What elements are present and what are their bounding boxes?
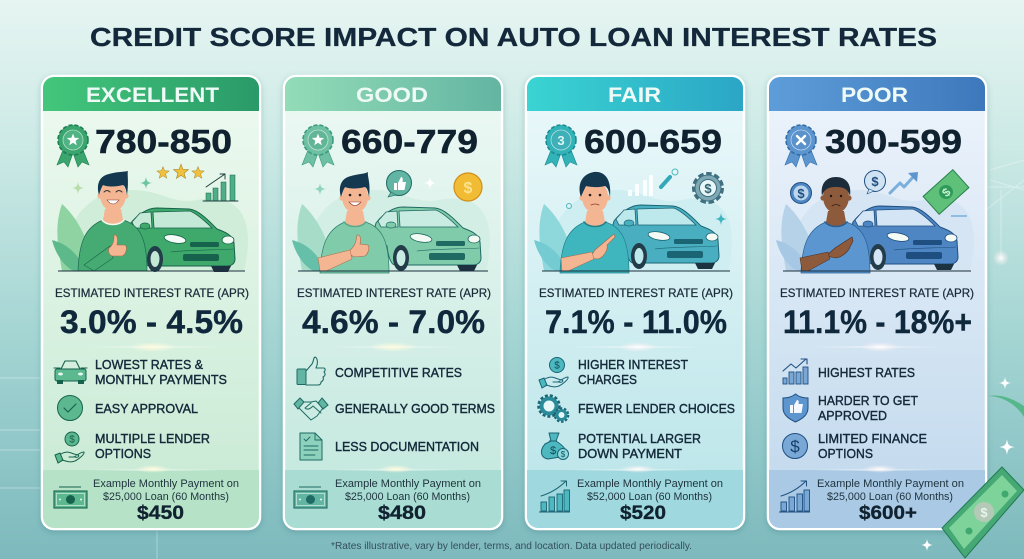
score range: 600-659 bbox=[584, 123, 722, 160]
bullet: lowest rates: LOWEST RATES & bbox=[95, 357, 203, 372]
header: poor: POOR bbox=[841, 84, 908, 107]
rate: 7.1 to 11.0: 7.1% - 11.0% bbox=[545, 304, 727, 340]
bullet: fewer lender choices: FEWER LENDER CHOICES bbox=[578, 401, 735, 416]
panel: excellent bbox=[42, 76, 260, 529]
bullet: higher interest bbox=[578, 357, 688, 387]
icon: floating dollar bill bbox=[942, 467, 1024, 558]
bullet: harder to get: APPROVED bbox=[818, 408, 887, 423]
bullet: potential larger: DOWN PAYMENT bbox=[578, 446, 682, 461]
icon: shield thumb bbox=[783, 394, 808, 422]
illustration: worried man and blue car: $ bbox=[939, 185, 954, 200]
icon: handshake bbox=[294, 398, 328, 420]
bullet: potential larger: POTENTIAL LARGER bbox=[578, 431, 701, 446]
icon: check circle bbox=[58, 396, 82, 420]
title: CREDIT SCORE IMPACT ON AUTO LOAN INTEREST RATES bbox=[90, 22, 937, 52]
bullet: generally good terms: GENERALLY GOOD TERMS bbox=[335, 401, 495, 416]
label: estimated rate: ESTIMATED INTEREST RATE (APR) bbox=[297, 286, 491, 300]
icon: rosette cross bbox=[785, 125, 817, 167]
bullet: harder to get: HARDER TO GET bbox=[818, 393, 918, 408]
band: monthly payment: Example Monthly Payment on bbox=[93, 478, 239, 490]
band: monthly payment: $520 bbox=[620, 503, 666, 524]
panel: poor bbox=[768, 76, 986, 529]
bullet: potential larger bbox=[578, 431, 701, 461]
icon: dollar circle: $ bbox=[790, 437, 800, 456]
band: monthly payment: $450 bbox=[137, 503, 184, 524]
icon: money bag: $ bbox=[561, 450, 566, 459]
bullet: lowest rates bbox=[95, 357, 227, 387]
icon: rosette star bbox=[302, 125, 334, 167]
bullet: multiple lender: MULTIPLE LENDER bbox=[95, 431, 210, 446]
icon: hand with coin: $ bbox=[69, 434, 75, 446]
icon: hand with coin bbox=[55, 432, 84, 463]
illustration: neutral man and teal car: $ bbox=[704, 181, 712, 196]
icon: rosette star bbox=[57, 125, 89, 167]
icon: rising chart bbox=[783, 359, 808, 384]
icon: gears bbox=[538, 396, 568, 422]
band: monthly payment: Example Monthly Payment on bbox=[577, 478, 723, 490]
panel: good bbox=[284, 76, 502, 529]
illustration: worried man and blue car: $ bbox=[871, 174, 879, 189]
icon: rosette three bbox=[545, 125, 577, 167]
bullet: limited finance: LIMITED FINANCE bbox=[818, 431, 927, 446]
bullet: highest rates: HIGHEST RATES bbox=[818, 365, 915, 380]
score range: 300-599 bbox=[825, 123, 962, 160]
label: estimated rate: ESTIMATED INTEREST RATE (APR) bbox=[55, 286, 249, 300]
label: estimated rate: ESTIMATED INTEREST RATE (APR) bbox=[539, 286, 733, 300]
icon: document bbox=[300, 433, 322, 460]
bullet: less documentation: LESS DOCUMENTATION bbox=[335, 439, 479, 454]
band: monthly payment: $25,000 Loan (60 Months) bbox=[345, 491, 470, 503]
bullet: lowest rates: MONTHLY PAYMENTS bbox=[95, 372, 227, 387]
band: monthly payment: $25,000 Loan (60 Months) bbox=[103, 491, 229, 503]
footnote: *Rates illustrative, vary by lender, terms, and location. Data updated periodically. bbox=[331, 541, 692, 552]
header: good bbox=[285, 77, 501, 111]
rate: 11.1 to 18+: 11.1% - 18%+ bbox=[783, 304, 972, 340]
bullet: limited finance: OPTIONS bbox=[818, 446, 873, 461]
icon: floating dollar bill: $ bbox=[980, 505, 988, 520]
illustration: smiling man and mint car bbox=[292, 170, 490, 273]
header: excellent bbox=[43, 77, 259, 111]
bullet: higher interest: HIGHER INTEREST bbox=[578, 357, 688, 372]
band: monthly payment: $25,000 Loan (60 Months) bbox=[827, 491, 953, 503]
icon: dollar circle bbox=[782, 434, 808, 458]
header: poor bbox=[769, 77, 985, 111]
icon: hand with coin bbox=[539, 358, 568, 388]
band: monthly payment bbox=[43, 465, 259, 528]
band: monthly payment: Example Monthly Payment on bbox=[335, 478, 481, 490]
panel: fair bbox=[526, 76, 744, 529]
icon: rosette three: 3 bbox=[557, 133, 565, 148]
band: monthly payment: $52,000 Loan (60 Months) bbox=[587, 491, 712, 503]
band: monthly payment: $480 bbox=[378, 503, 426, 524]
bullet: higher interest: CHARGES bbox=[578, 372, 637, 387]
bullet: competitive rates: COMPETITIVE RATES bbox=[335, 365, 462, 380]
illustration: worried man and blue car bbox=[776, 170, 974, 273]
header: fair: FAIR bbox=[608, 84, 661, 107]
rate: 3.0 to 4.5: 3.0% - 4.5% bbox=[60, 304, 243, 340]
label: estimated rate: ESTIMATED INTEREST RATE (APR) bbox=[780, 286, 974, 300]
header: excellent: EXCELLENT bbox=[86, 84, 219, 107]
band: monthly payment: Example Monthly Payment on bbox=[817, 478, 964, 490]
score range: 780-850 bbox=[95, 123, 232, 160]
band: monthly payment bbox=[527, 465, 743, 528]
band: monthly payment: $600+ bbox=[859, 503, 917, 524]
bullet: easy approval: EASY APPROVAL bbox=[95, 401, 198, 416]
illustration: smiling man and green car bbox=[52, 164, 248, 272]
band: monthly payment bbox=[769, 465, 985, 528]
icon: money bag: $ bbox=[550, 445, 556, 457]
sparkles bbox=[921, 377, 1015, 551]
bullet: multiple lender bbox=[95, 431, 210, 461]
band: monthly payment bbox=[285, 465, 501, 528]
bullet: limited finance bbox=[818, 431, 927, 461]
illustration: worried man and blue car: $ bbox=[797, 186, 805, 201]
illustration: neutral man and teal car bbox=[534, 169, 732, 273]
bullet: multiple lender: OPTIONS bbox=[95, 446, 151, 461]
score range: 660-779 bbox=[341, 123, 478, 160]
icon: leaf at right edge bbox=[988, 395, 1024, 417]
icon: car front bbox=[54, 361, 87, 384]
icon: hand with coin: $ bbox=[554, 360, 560, 372]
header: fair bbox=[527, 77, 743, 111]
bullet: harder to get bbox=[818, 393, 918, 423]
icon: thumbs up bbox=[297, 357, 325, 385]
icon: money bag bbox=[541, 433, 568, 460]
illustration: smiling man and mint car: $ bbox=[464, 180, 473, 197]
header: good: GOOD bbox=[356, 84, 428, 107]
rate: 4.6 to 7.0: 4.6% - 7.0% bbox=[302, 304, 485, 340]
